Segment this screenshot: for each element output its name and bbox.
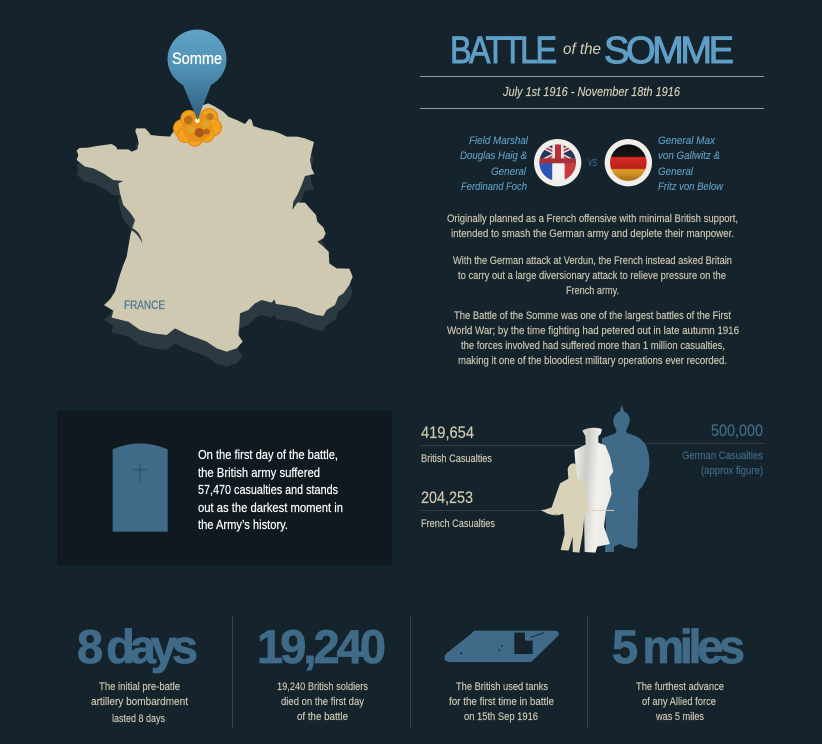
title bbox=[450, 30, 734, 72]
date band: July 1st 1916 - November 18th 1916 bbox=[502, 85, 680, 99]
text block: background of the battle: to carry out a large diversionary attack to relieve pressure on the bbox=[458, 270, 726, 282]
panel text: the British army suffered bbox=[198, 465, 320, 480]
icon: German flag bbox=[605, 139, 652, 186]
map pin: Somme: Somme bbox=[172, 50, 222, 68]
stat: 5 miles: 5 miles bbox=[612, 620, 745, 673]
text block: background of the battle: With the German attack at Verdun, the French instead asked Britain bbox=[453, 255, 732, 267]
icon: British and French flag bbox=[534, 139, 581, 186]
text block: background of the battle: Originally planned as a French offensive with minimal British support, bbox=[447, 213, 738, 225]
stat: 19,240: died on the first day bbox=[281, 696, 365, 708]
map label: FRANCE bbox=[124, 298, 165, 312]
german commanders: Fritz von Below bbox=[658, 181, 724, 193]
title: SOMME bbox=[604, 30, 734, 72]
allied commanders: Field Marshal bbox=[469, 135, 528, 147]
stat: 19,240: of the battle bbox=[297, 711, 348, 723]
stat: German casualties: German Casualties bbox=[682, 450, 764, 462]
map shadow bbox=[77, 118, 353, 367]
french soldier bbox=[542, 463, 589, 553]
allied commanders: Douglas Haig & bbox=[460, 150, 527, 162]
map pin: Somme bbox=[167, 30, 226, 120]
stat: French casualties: 204,253 bbox=[421, 489, 473, 507]
text block: background of the battle: the forces involved had suffered more than 1 million casualties, bbox=[461, 340, 725, 352]
british soldier bbox=[574, 428, 613, 553]
stat: 5 miles bbox=[612, 620, 745, 723]
allied commanders: General bbox=[491, 166, 526, 178]
stat: French casualties: French Casualties bbox=[421, 518, 496, 530]
map land bbox=[77, 103, 353, 352]
icon: gravestone bbox=[113, 443, 168, 532]
text block: background of the battle: The Battle of the Somme was one of the largest battles of the First bbox=[454, 310, 731, 322]
panel text: 57,470 casualties and stands bbox=[198, 482, 338, 497]
panel text: On the first day of the battle, bbox=[198, 447, 338, 462]
stat: 8 days: lasted 8 days bbox=[112, 713, 165, 725]
panel text: the Army’s history. bbox=[198, 517, 288, 532]
panel text bbox=[198, 447, 343, 532]
stat: British casualties: British Casualties bbox=[421, 453, 492, 465]
text block: background of the battle: French army. bbox=[566, 285, 619, 297]
stat: 5 miles: was 5 miles bbox=[655, 711, 705, 723]
stat: German casualties bbox=[640, 422, 764, 477]
map: France bbox=[77, 103, 353, 367]
stat: 19,240 bbox=[257, 620, 386, 723]
text block: background of the battle bbox=[447, 213, 739, 367]
stat: 19,240: 19,240 British soldiers bbox=[277, 681, 369, 693]
stat: German casualties: 500,000 bbox=[711, 422, 763, 440]
rifle bbox=[542, 510, 614, 515]
text block: background of the battle: intended to smash the German army and deplete their manpower. bbox=[451, 228, 734, 240]
caption: tanks bbox=[449, 681, 554, 723]
panel text: out as the darkest moment in bbox=[198, 500, 343, 515]
stat: French casualties bbox=[421, 489, 551, 530]
text block: background of the battle: making it one of the bloodiest military operations ever recorded. bbox=[458, 355, 727, 367]
stat: British casualties: 419,654 bbox=[421, 424, 474, 442]
stat: German casualties: (approx figure) bbox=[701, 465, 763, 477]
caption: tanks: for the first time in battle bbox=[449, 696, 554, 708]
stat: 5 miles: of any Allied force bbox=[642, 696, 716, 708]
icon: tank bbox=[444, 631, 559, 662]
german commanders: von Gallwitz & bbox=[658, 150, 720, 162]
vs: VS bbox=[588, 158, 597, 169]
german commanders: General Max bbox=[658, 135, 715, 147]
caption: tanks: on 15th Sep 1916 bbox=[464, 711, 538, 723]
stat: 5 miles: The furthest advance bbox=[636, 681, 724, 693]
icon: explosion bbox=[173, 108, 222, 147]
stat: 19,240: 19,240 bbox=[257, 620, 386, 673]
panel: first day bbox=[57, 411, 392, 565]
stat: 8 days bbox=[77, 620, 198, 725]
german soldier bbox=[602, 405, 649, 552]
stat: 8 days: The initial pre-batle bbox=[99, 681, 180, 693]
stat: 8 days: artillery bombardment bbox=[91, 696, 188, 708]
icon: soldier silhouettes bbox=[542, 405, 649, 553]
german commanders: General bbox=[658, 166, 693, 178]
estuary bbox=[131, 227, 142, 243]
allied commanders bbox=[460, 135, 528, 193]
stat: British casualties bbox=[421, 424, 586, 465]
allied commanders: Ferdinand Foch bbox=[461, 181, 527, 193]
caption: tanks: The British used tanks bbox=[456, 681, 549, 693]
stat: 8 days: 8 days bbox=[77, 620, 198, 673]
text block: background of the battle: World War; by the time fighting had petered out in late autumn 1916 bbox=[447, 325, 739, 337]
title: of the bbox=[563, 41, 601, 58]
german commanders bbox=[658, 135, 724, 193]
title: BATTLE bbox=[450, 30, 557, 72]
